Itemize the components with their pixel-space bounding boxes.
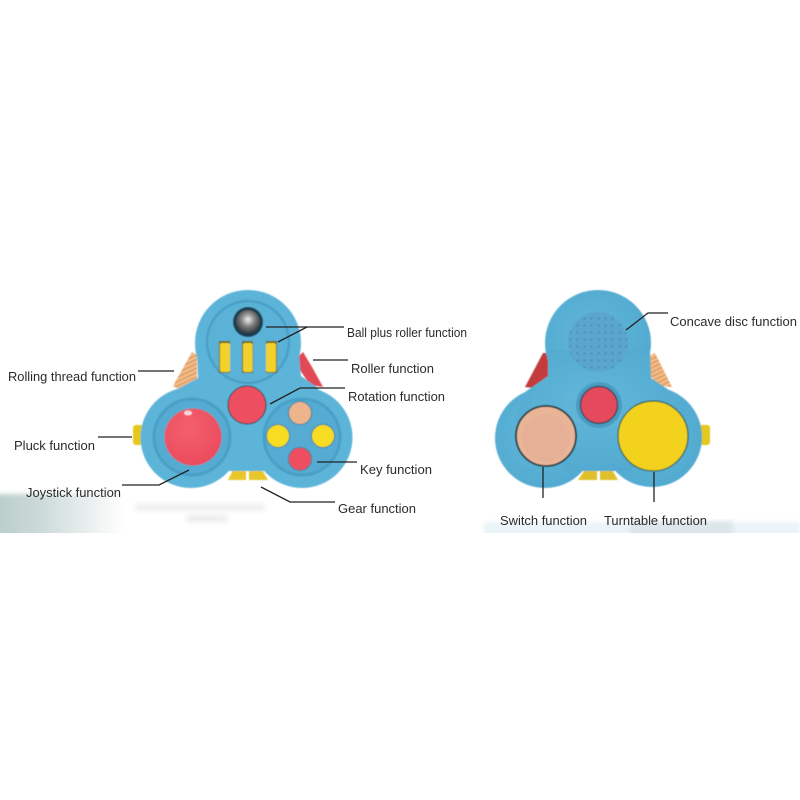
label: roller: Roller function (351, 362, 434, 376)
label: rolling thread: Rolling thread function (8, 370, 136, 384)
rolling thread wheel (173, 352, 197, 390)
yellow gear (578, 468, 618, 480)
label: rotation: Rotation function (348, 390, 445, 404)
device: front view (133, 290, 352, 488)
top lobe recess (207, 301, 289, 383)
label: gear: Gear function (338, 502, 416, 516)
background smudge: lower right (484, 520, 800, 533)
dark red roller wheel (525, 353, 549, 388)
center rotation button (228, 386, 266, 424)
joystick (164, 408, 222, 466)
three yellow rollers (219, 341, 277, 373)
concave textured disc (568, 312, 628, 372)
yellow pluck tab (133, 425, 145, 445)
center red button (576, 382, 622, 428)
peach switch (516, 406, 576, 466)
label: ball plus roller: Ball plus roller function (347, 326, 467, 340)
label: concave disc: Concave disc function (670, 315, 797, 329)
yellow pluck tab (698, 425, 710, 445)
device: back view (495, 290, 710, 488)
label: key: Key function (360, 463, 432, 477)
steel ball (233, 307, 263, 337)
right lobe recess (264, 399, 340, 475)
left lobe recess (154, 399, 230, 475)
blue body (495, 290, 702, 488)
label: joystick: Joystick function (26, 486, 121, 500)
blue body (140, 290, 352, 488)
leader lines (98, 313, 668, 502)
rolling thread wheel (648, 353, 672, 387)
four keys (266, 402, 334, 470)
background smudge: lower left (0, 494, 265, 539)
label: switch: Switch function (500, 514, 587, 528)
label: pluck: Pluck function (14, 439, 95, 453)
yellow gear (228, 468, 268, 480)
label: turntable: Turntable function (604, 514, 707, 528)
yellow turntable (618, 401, 688, 471)
red roller wheel (298, 352, 323, 387)
